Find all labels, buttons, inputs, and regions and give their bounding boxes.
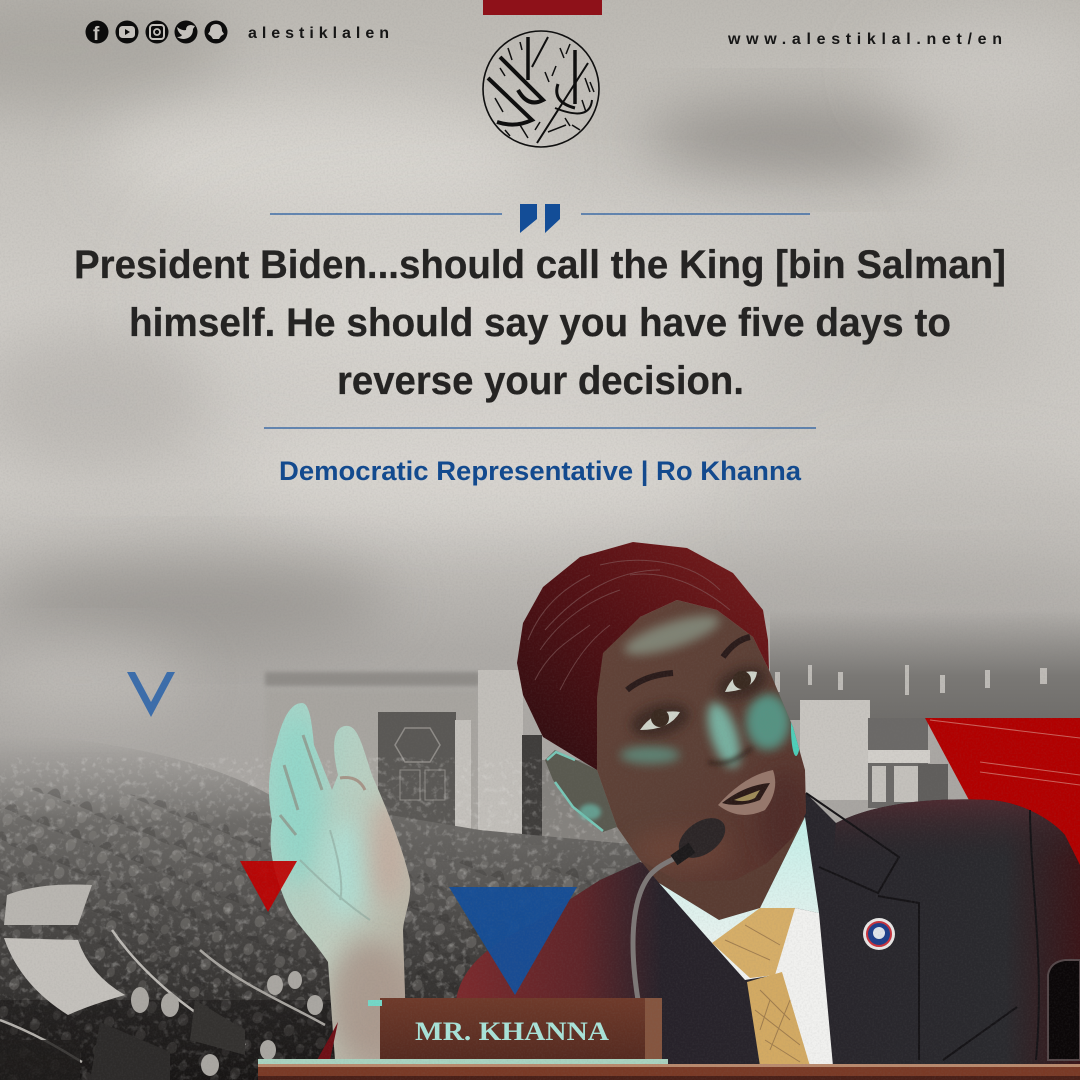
microphone [633,810,732,1000]
person: hair highlights [528,560,730,690]
person: suit jacket [456,793,1080,1066]
name plate [368,998,662,1060]
person: gold tie [712,908,810,1066]
social icons row [86,20,228,45]
person: neck [640,817,805,920]
website url: www.alestiklal.net/en [727,31,1002,48]
icon: instagram [146,20,168,44]
person: face [597,600,806,871]
shape: blue triangle over the sleeve [449,887,577,995]
person: jacket lapels [806,793,1039,1060]
right device edge [1048,960,1080,1060]
icon: facebook: f [93,24,100,45]
chamber: seated crowd [0,735,640,1080]
quote text: reverse your decision. [337,359,744,403]
icon: facebook [86,20,108,45]
divider below quote [264,427,816,429]
attribution: Democratic Representative | Ro Khanna [279,456,802,486]
icon: twitter [174,20,198,44]
top red tab [483,0,602,15]
person: shirt and collar [659,817,833,1066]
chamber: curved floor and benches [0,884,325,1080]
divider above quote [270,213,810,215]
social handle: alestiklalen [248,25,389,42]
icon: snapchat [204,20,228,44]
person: eyes and brows [627,637,757,730]
chamber: back wall architecture [265,670,642,900]
chamber: right balcony and frieze [770,610,1080,808]
small red triangle [240,861,297,912]
quote text: himself. He should say you have five days to [129,301,951,345]
shape: large red triangle right [925,718,1080,880]
desk edge [258,1059,1080,1080]
shape: blue chevron [127,672,175,717]
icon: youtube [116,20,138,44]
quote text: President Biden...should call the King [bin Salman] [74,243,1006,287]
logo: calligraphic roundel [483,31,599,147]
raised hand [269,703,410,1059]
person: hair [517,542,769,770]
lapel pin [863,918,895,950]
quote mark [520,204,560,233]
name plate: MR. KHANNA [415,1017,609,1046]
person: eye sockets [628,700,691,740]
person: nose and mouth [708,748,775,815]
person: ear [545,750,617,832]
quote text [74,243,1006,403]
